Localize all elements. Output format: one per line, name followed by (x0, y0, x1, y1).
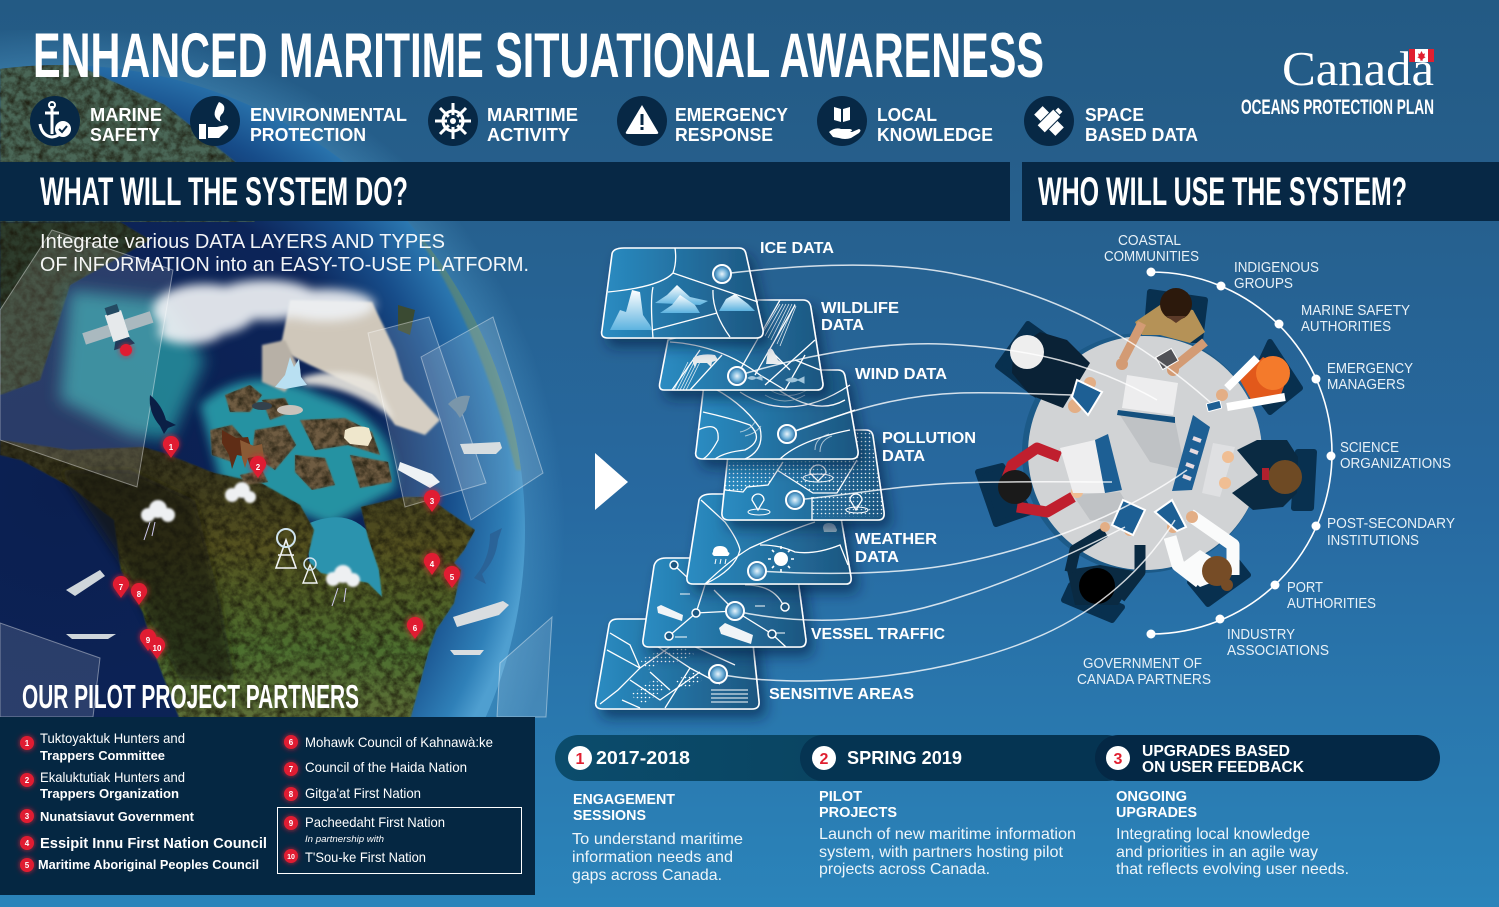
user ring (1146, 268, 1336, 638)
theme: environmental protection (190, 96, 407, 146)
user labels: COASTAL (1118, 233, 1181, 249)
step 2 header (812, 746, 962, 770)
layer card: ice (602, 248, 763, 338)
arrow (595, 453, 628, 510)
layer card: sensitive areas (596, 619, 759, 709)
table shadows (1073, 412, 1185, 525)
partnership box: Pacheedaht First Nation (305, 814, 445, 830)
map pins: 9 (146, 636, 151, 645)
step 2 text: PILOT (819, 789, 862, 805)
partner names right column: Gitga'at First Nation (305, 785, 421, 801)
partner numbers: 4 (25, 839, 30, 848)
partner numbers: 3 (25, 812, 30, 821)
partner numbers: 1 (25, 739, 30, 748)
step 3 text: Integrating local knowledge (1116, 826, 1310, 843)
partner numbers: 7 (289, 765, 294, 774)
user labels: AUTHORITIES (1287, 596, 1376, 612)
theme: local knowledge: LOCAL (877, 104, 937, 125)
step 2 text: PROJECTS (819, 805, 897, 821)
partnership box: In partnership with (305, 834, 384, 844)
step 1 header: 2017-2018 (596, 748, 690, 768)
map pins: 7 (119, 583, 124, 592)
timeline (555, 735, 1440, 884)
person: red sweater (998, 448, 1083, 512)
data labels: ICE DATA (760, 240, 834, 257)
partner names left column: Essipit Innu First Nation Council (40, 836, 267, 852)
wildlife and vessels on the map (66, 357, 509, 655)
map pins: 1 (169, 443, 174, 452)
user labels: MARINE SAFETY (1301, 303, 1410, 319)
theme: marine safety: SAFETY (90, 124, 161, 145)
theme: space based data (1024, 96, 1198, 146)
intro text: Integrate various DATA LAYERS AND TYPES (40, 230, 445, 253)
heading: pilot project partners: OUR PILOT PROJECT PARTNERS (22, 678, 359, 715)
data labels: DATA (882, 448, 925, 465)
person: black hair (1067, 522, 1140, 605)
person: tan shirt (1116, 288, 1205, 376)
partner names left column: Maritime Aboriginal Peoples Council (38, 858, 259, 872)
map pins: 4 (430, 560, 435, 569)
theme: marine safety: MARINE (90, 104, 162, 125)
user labels: GROUPS (1234, 276, 1293, 292)
intro text: OF INFORMATION into an EASY-TO-USE PLATFORM. (40, 253, 529, 276)
person: dark suit (1172, 415, 1302, 510)
intro text (40, 230, 529, 276)
partner names left column: Ekaluktutiak Hunters and (40, 769, 185, 785)
connector lines from data layers to users (718, 265, 1210, 681)
user labels: ASSOCIATIONS (1227, 643, 1329, 659)
step 1 header: 1 (576, 751, 585, 768)
data labels: DATA (855, 549, 899, 566)
data labels: SENSITIVE AREAS (769, 686, 914, 703)
step 1 text: gaps across Canada. (572, 867, 722, 884)
partner names left column (38, 730, 267, 872)
round table and users (978, 288, 1314, 620)
map pins (113, 436, 460, 659)
user labels: POST-SECONDARY (1327, 516, 1455, 532)
devices (1060, 348, 1222, 535)
map pins: 5 (450, 573, 455, 582)
data labels (760, 240, 976, 703)
data panels over the globe (0, 230, 552, 717)
partner names right column: Council of the Haida Nation (305, 759, 467, 775)
user labels: MANAGERS (1327, 377, 1405, 393)
user labels: EMERGENCY (1327, 361, 1413, 377)
data labels: DATA (821, 317, 864, 334)
layer card: wind (696, 370, 858, 459)
data labels: VESSEL TRAFFIC (811, 626, 945, 643)
partner names left column: Trappers Organization (40, 787, 179, 801)
step 1 text (572, 792, 743, 884)
theme: space based data: SPACE (1085, 104, 1144, 125)
partner numbers (20, 735, 298, 872)
theme: emergency response: RESPONSE (675, 124, 773, 145)
theme: local knowledge: KNOWLEDGE (877, 124, 993, 145)
person: hard hat (1216, 356, 1290, 407)
map pins: 6 (413, 624, 418, 633)
step 3 text: UPGRADES (1116, 805, 1197, 821)
section header: what will the system do (0, 162, 1010, 221)
layer card: pollution (722, 430, 884, 520)
data labels: POLLUTION (882, 430, 976, 447)
partner numbers: 2 (25, 776, 30, 785)
partner numbers: 10 (287, 854, 295, 861)
user labels: INDUSTRY (1227, 627, 1295, 643)
partnership box: T'Sou-ke First Nation (305, 849, 426, 865)
icon: satellite signal (120, 344, 132, 356)
step 3 header (1106, 743, 1304, 776)
layer card: wildlife (660, 300, 823, 390)
partner numbers: 8 (289, 790, 294, 799)
partner names left column: Nunatsiavut Government (40, 810, 195, 824)
map pins: 10 (153, 644, 162, 653)
user labels: ORGANIZATIONS (1340, 456, 1451, 472)
panel: partners list (0, 717, 535, 895)
user labels: INSTITUTIONS (1327, 533, 1419, 549)
section header: what will the system do: WHAT WILL THE SYSTEM DO? (40, 170, 408, 214)
step 1 text: information needs and (572, 849, 733, 866)
step 2 text: system, with partners hosting pilot (819, 844, 1064, 861)
step 2 text: Launch of new maritime information (819, 826, 1076, 843)
data labels: WIND DATA (855, 366, 947, 383)
table top (1028, 336, 1262, 570)
layer nodes (709, 265, 804, 683)
step 1 header (568, 746, 690, 770)
theme: space based data: BASED DATA (1085, 124, 1198, 145)
step 3 text (1116, 789, 1349, 878)
map pins: 3 (430, 497, 435, 506)
partner numbers: 9 (289, 819, 294, 828)
theme: emergency response: EMERGENCY (675, 104, 789, 125)
layer card: vessel traffic (643, 558, 806, 647)
step 1 text: SESSIONS (573, 808, 646, 824)
partner names right column (305, 734, 493, 801)
clouds and radio towers (141, 482, 360, 606)
partner numbers: 6 (289, 738, 294, 747)
theme: maritime activity: ACTIVITY (487, 124, 571, 145)
step 3 text: and priorities in an agile way (1116, 844, 1318, 861)
step 1 text: ENGAGEMENT (573, 792, 675, 808)
partner names left column: Trappers Committee (40, 749, 165, 763)
partnership box (278, 808, 522, 874)
theme: emergency response (617, 96, 789, 146)
theme: maritime activity: MARITIME (487, 104, 578, 125)
user labels: SCIENCE (1340, 440, 1399, 456)
user labels: PORT (1287, 580, 1323, 596)
partner numbers: 5 (25, 861, 30, 870)
step 1 text: To understand maritime (572, 831, 743, 848)
step 3 header: ON USER FEEDBACK (1142, 759, 1304, 776)
person: navy officer (1010, 332, 1096, 413)
user labels (1077, 233, 1455, 688)
user labels: GOVERNMENT OF (1083, 656, 1202, 672)
user labels: INDIGENOUS (1234, 260, 1319, 276)
timeline bar (555, 735, 1440, 781)
archipelago islands (210, 385, 392, 490)
Canada wordmark: Canada (1282, 41, 1434, 96)
step 2 text (819, 789, 1076, 878)
theme: environmental protection: ENVIRONMENTAL (250, 104, 407, 125)
data labels: WILDLIFE (821, 300, 899, 317)
user labels: COMMUNITIES (1104, 249, 1199, 265)
user labels: AUTHORITIES (1301, 319, 1391, 335)
step 3 text: that reflects evolving user needs. (1116, 861, 1349, 878)
partner names left column: Tuktoyaktuk Hunters and (40, 730, 185, 746)
map pins: 2 (256, 463, 261, 472)
globe (0, 30, 570, 720)
step 3 header: 3 (1114, 751, 1123, 768)
step 2 text: projects across Canada. (819, 861, 990, 878)
map pins: 8 (137, 590, 142, 599)
theme: marine safety (30, 96, 162, 146)
theme: environmental protection: PROTECTION (250, 124, 366, 145)
data labels: WEATHER (855, 531, 937, 548)
theme: local knowledge (817, 96, 993, 146)
theme: maritime activity (428, 96, 578, 146)
step 3 header: UPGRADES BASED (1142, 743, 1290, 760)
user labels: CANADA PARTNERS (1077, 672, 1211, 688)
layer card: weather (687, 494, 851, 584)
icon: satellite (77, 295, 158, 358)
step 3 text: ONGOING (1116, 789, 1187, 805)
chairs (978, 292, 1314, 620)
data layer stack (596, 248, 884, 709)
person: white shirt (1167, 511, 1237, 591)
step 2 header: 2 (820, 751, 829, 768)
step 2 header: SPRING 2019 (847, 748, 962, 768)
partner names right column: Mohawk Council of Kahnawà:ke (305, 734, 493, 750)
